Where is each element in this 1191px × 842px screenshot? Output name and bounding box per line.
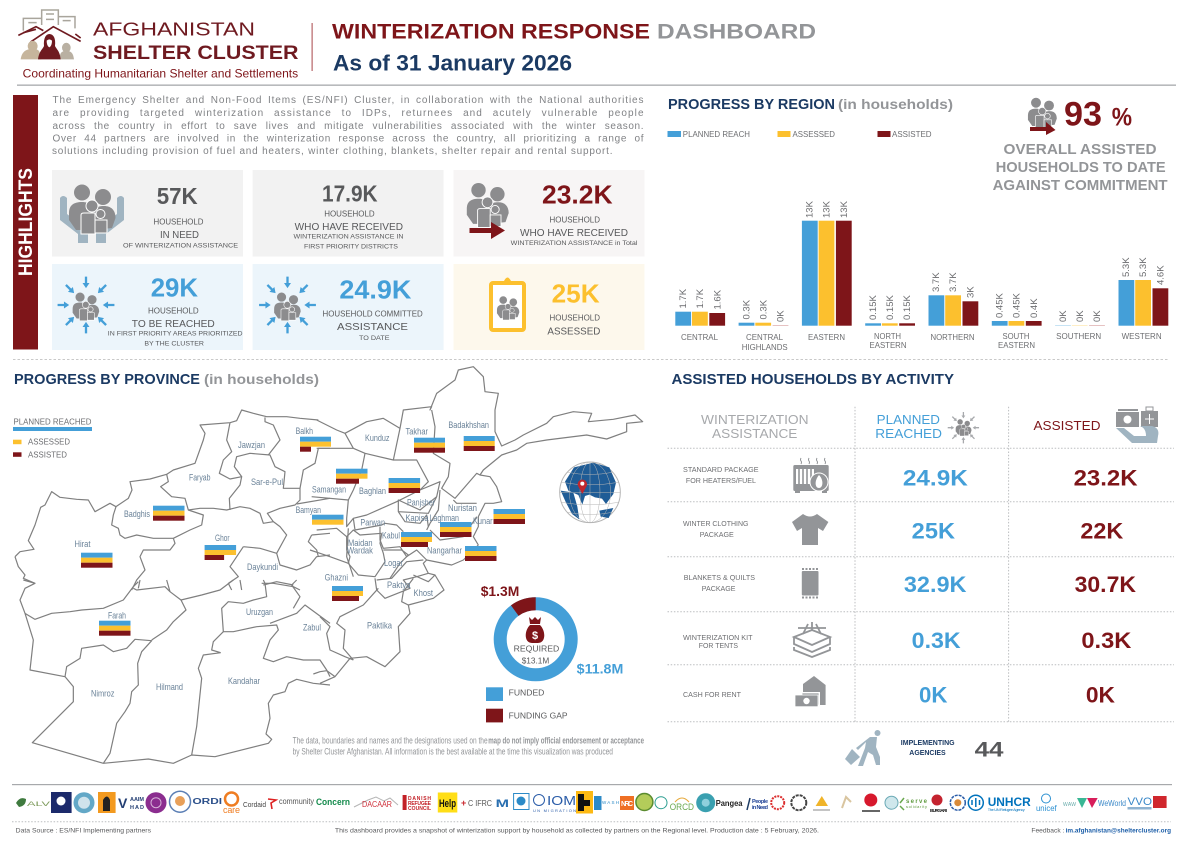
province labels: Sar-e-Pul [251, 477, 283, 488]
partner logos strip: UN MIGRATION [533, 808, 576, 813]
row: winterization kit [683, 622, 1132, 657]
row: winter clothing: WINTER CLOTHING [683, 519, 749, 528]
highlights paragraph: are providing targeted winterization assistance to IDPs, returnees and acutely vulnerable people [52, 108, 644, 119]
callout: 93 percent: HOUSEHOLDS TO DATE [996, 159, 1166, 176]
card: household in need: OF WINTERIZATION ASSISTANCE [123, 243, 239, 250]
card: first priority districts: FIRST PRIORITY DISTRICTS [304, 244, 399, 251]
group: Northern: 3.7K [931, 272, 942, 292]
table header: PLANNED [877, 413, 940, 427]
funding legend [486, 687, 568, 722]
partner logos strip [16, 791, 1167, 815]
implementing agencies [845, 730, 1004, 766]
partner logos strip: DANISH [408, 796, 431, 802]
group: Central: 1.7K [678, 288, 689, 308]
row: standard package [683, 458, 1138, 493]
row: blankets and quilts: 30.7K [1075, 572, 1136, 597]
panel: assisted households by activity [668, 371, 1174, 766]
card: received in total: 23.2K [542, 179, 613, 209]
province labels: Hirat [74, 539, 91, 550]
partner logos strip: HAD [130, 805, 144, 811]
chart: funding donut [481, 583, 623, 676]
province labels: Takhar [406, 427, 428, 438]
province labels: Samangan [312, 484, 346, 495]
province labels: Ghazni [325, 573, 348, 584]
icon: money, kit and hand [1116, 407, 1158, 443]
card: first priority districts: WINTERIZATION ASSISTANCE IN [294, 234, 404, 241]
table header: WINTERIZATION [701, 413, 809, 427]
province labels: Nuristan [448, 503, 477, 514]
row: winter clothing: 25K [912, 519, 955, 544]
province labels: Ghor [215, 533, 230, 544]
group: North Eastern: 0.15K [885, 295, 896, 320]
group: North Eastern: EASTERN [870, 341, 907, 350]
group: Central Highlands [739, 299, 788, 352]
map legend: PLANNED REACHED [14, 418, 92, 427]
group: Northern [928, 272, 978, 342]
card: first priority districts: 17.9K [322, 181, 378, 207]
group: Western: 5.3K [1121, 257, 1132, 277]
group: Central Highlands: 0K [776, 310, 787, 322]
province labels: Badghis [124, 509, 150, 520]
card: committed assistance [253, 264, 444, 350]
partner logos strip: Concern [316, 797, 350, 807]
icon: globe with location pin [560, 462, 620, 523]
icon: family with inward arrows [58, 277, 114, 333]
row: winterization kit: WINTERIZATION KIT [683, 633, 753, 642]
partner logos strip: care [223, 805, 240, 815]
footer text: im.afghanistan@sheltercluster.org [1066, 828, 1171, 835]
province labels: Kunduz [365, 433, 390, 444]
callout: 93 percent: OVERALL ASSISTED [1004, 141, 1157, 158]
partner logos strip: solidarity [906, 804, 927, 809]
province labels: Laghman [430, 513, 459, 524]
province labels [74, 420, 493, 700]
province labels: Uruzgan [246, 607, 273, 618]
card: to be reached: 29K [151, 273, 198, 303]
card: received in total: HOUSEHOLD [550, 216, 600, 225]
legend: ASSISTED [892, 130, 932, 139]
highlights paragraph: Over 44 partners are involved in the winterization response across the country, all prioritizing a range of [52, 134, 644, 145]
card: household in need [52, 170, 243, 256]
card: to be reached: HOUSEHOLD [148, 307, 199, 316]
table header: REACHED [875, 427, 942, 441]
icon: family with arrow [1028, 98, 1057, 135]
highlights paragraph: The Emergency Shelter and Non-Food Items (ES/NFI) Cluster, in collaboration with the National authorities [52, 95, 643, 106]
province labels: Panjsher [407, 498, 435, 509]
row: winterization kit: 0.3K [912, 628, 961, 653]
partner logos strip: + [461, 798, 466, 808]
province labels: Kapisa [406, 513, 429, 524]
partner logos strip: WAW [1063, 802, 1076, 808]
disclaimer: The data, boundaries and names and the designations used on the [293, 735, 488, 745]
icon: family with arrows [948, 412, 979, 443]
heading: ASSISTED HOUSEHOLDS BY ACTIVITY [672, 371, 954, 388]
highlights side bar: HIGHLIGHTS [16, 168, 37, 276]
province labels: Baghlan [359, 486, 386, 497]
row: cash for rent: CASH FOR RENT [683, 690, 741, 699]
province labels: Balkh [296, 426, 313, 437]
title [332, 20, 816, 76]
card: committed assistance: HOUSEHOLD COMMITTED [322, 310, 423, 319]
group: Eastern [802, 200, 852, 342]
map of Afghanistan provinces [15, 367, 643, 763]
partner logos strip: ORCD [670, 802, 694, 812]
card: committed assistance: ASSISTANCE [337, 322, 408, 333]
row: cash for rent: 0K [1086, 683, 1115, 708]
bar chart [675, 200, 1168, 352]
partner logos strip: in Need [752, 805, 768, 811]
partner logos strip: C IFRC [468, 799, 492, 808]
table header [701, 407, 1158, 443]
province labels: Jawzjan [238, 440, 265, 451]
card: received in total [454, 170, 644, 256]
row: blankets and quilts [684, 568, 1136, 598]
icon: family with inward arrows [259, 277, 316, 333]
group: Western: WESTERN [1122, 332, 1162, 341]
group: Northern: NORTHERN [930, 333, 975, 342]
province labels: Paktika [367, 621, 393, 632]
group: Western [1118, 257, 1168, 341]
disclaimer: map do not imply official endorsement or acceptance [488, 735, 644, 745]
table header: ASSISTED [1034, 419, 1100, 433]
chart: funding donut: REQUIRED [514, 644, 559, 654]
partner logos strip: REFUGEE [408, 801, 432, 807]
row: winter clothing: PACKAGE [700, 530, 734, 539]
card: household in need: IN NEED [160, 230, 199, 241]
row: winterization kit: FOR TENTS [699, 641, 738, 650]
province labels: Nangarhar [427, 546, 462, 557]
province labels: Wardak [347, 546, 373, 557]
partner logos strip: People [752, 799, 768, 805]
highlights paragraph: solutions including provision of fuel and heaters, winter clothing, blankets, shelter repair and rental support. [52, 146, 612, 157]
title: WINTERIZATION RESPONSE [332, 20, 650, 44]
title: DASHBOARD [657, 20, 816, 44]
province labels: Badakhshan [448, 420, 489, 431]
row: blankets and quilts: 32.9K [904, 572, 967, 597]
group: Western: 5.3K [1138, 257, 1149, 277]
row: cash for rent [683, 676, 1115, 708]
group: South Eastern: 0.45K [1012, 293, 1022, 318]
group: North Eastern: 0.15K [868, 295, 879, 320]
row: standard package: STANDARD PACKAGE [683, 465, 759, 474]
group: Central Highlands: 0.3K [741, 299, 752, 320]
partner logos strip: VVO [1128, 796, 1152, 808]
group: Eastern: 13K [805, 200, 816, 218]
card: first priority districts [253, 170, 444, 256]
province boundaries [15, 367, 643, 763]
group: South Eastern: 0.4K [1029, 298, 1040, 318]
group: North Eastern: 0.15K [902, 295, 913, 320]
province labels: Kunar [473, 516, 493, 527]
province labels: Daykundi [247, 562, 278, 573]
province progress flags [81, 436, 525, 636]
card: to be reached: IN FIRST PRIORITY AREAS PRIORITIZED [108, 331, 243, 338]
panel: progress by province [13, 367, 644, 763]
group: Eastern: 13K [839, 200, 850, 218]
partner logos strip: DACAAR [362, 800, 392, 809]
group: South Eastern: 0.45K [994, 293, 1006, 318]
province labels: Zabul [303, 623, 321, 634]
logo tagline: Coordinating Humanitarian Shelter and Settlements [23, 66, 298, 80]
group: Central: 1.6K [712, 289, 723, 310]
heading [14, 371, 319, 388]
card: received in total: WINTERIZATION ASSISTANCE in Total [511, 240, 638, 247]
province labels: Bamyan [296, 505, 321, 516]
group: North Eastern [865, 295, 915, 350]
partner logos strip: WeWorld [1098, 799, 1126, 808]
panel: highlights [13, 95, 644, 350]
partner logos strip: unicef [1036, 804, 1057, 813]
partner logos strip: Cordaid [243, 800, 266, 809]
card: to be reached [52, 264, 243, 350]
row: blankets and quilts: BLANKETS & QUILTS [684, 573, 755, 582]
partner logos strip: UNHCR [988, 795, 1031, 809]
footer text: This dashboard provides a snapshot of winterization support by household as collected by partners on the Regional level. Production date : 5 February, 2026. [335, 828, 819, 835]
card: committed assistance: 24.9K [339, 274, 412, 304]
icon: house and cash [795, 676, 826, 707]
card: received in total: WHO HAVE RECEIVED [520, 228, 628, 239]
province labels: Kabul [382, 531, 400, 542]
legend: ASSESSED [792, 130, 835, 139]
group: Eastern: 13K [822, 200, 833, 218]
footer text: Data Source : ES/NFI Implementing partners [16, 828, 152, 835]
row: standard package: FOR HEATERS/FUEL [686, 476, 756, 485]
province labels: Maidan [348, 538, 373, 549]
group: Southern: SOUTHERN [1056, 332, 1101, 341]
partner logos strip: Pangea [716, 799, 743, 808]
province labels: Logar [384, 558, 403, 569]
province labels: Paktya [387, 580, 411, 591]
card: first priority districts: HOUSEHOLD [324, 210, 375, 219]
icon: heater [793, 458, 829, 493]
disclaimer: by Shelter Cluster Afghanistan. All information is the best available at the time this visualization was produced [293, 747, 613, 757]
card: household in need: HOUSEHOLD [154, 218, 204, 227]
card: first priority districts: WHO HAVE RECEIVED [295, 222, 403, 233]
card: assessed: HOUSEHOLD [550, 314, 600, 323]
funding legend: FUNDING GAP [509, 711, 568, 721]
callout: 93 percent [993, 96, 1168, 194]
row: standard package: 23.2K [1074, 465, 1138, 490]
group: Central Highlands: CENTRAL [746, 333, 784, 342]
map legend: ASSISTED [28, 451, 67, 460]
callout: 93 percent: AGAINST COMMITMENT [993, 177, 1168, 194]
partner logos strip: ALV [27, 802, 50, 808]
icon: blanket [802, 568, 818, 598]
group: Southern: 0K [1075, 310, 1086, 322]
row: winter clothing: 22K [1080, 519, 1123, 544]
group: Central: CENTRAL [681, 333, 719, 342]
partner logos strip: NRC [621, 801, 633, 808]
partner logos strip: serve [906, 799, 928, 805]
card: assessed: ASSESSED [547, 327, 600, 338]
icon: family with arrow [467, 183, 509, 239]
logo icon: buildings and people [18, 10, 81, 59]
logo wordmark: AFGHANISTAN [93, 20, 255, 40]
logo: Afghanistan Shelter Cluster [18, 10, 299, 80]
group: Southern: 0K [1058, 310, 1069, 322]
group: Central Highlands: HIGHLANDS [742, 343, 788, 352]
chart: funding donut: $1.3M [481, 583, 519, 599]
card: assessed: 25K [552, 279, 600, 309]
group: Southern: 0K [1092, 310, 1103, 322]
funding legend: FUNDED [509, 688, 544, 698]
partner logos strip: community [279, 797, 314, 806]
heading [668, 96, 953, 113]
card: assessed [454, 264, 644, 350]
chart: funding donut: $13.1M [522, 655, 549, 665]
group: Western: 4.6K [1156, 265, 1166, 285]
group: North Eastern: NORTH [874, 332, 901, 341]
province labels: Nimroz [91, 689, 115, 700]
group: Central: 1.7K [695, 288, 706, 308]
group: South Eastern [992, 293, 1042, 350]
row: cash for rent: 0K [919, 683, 948, 708]
panel: progress by region [668, 96, 1168, 352]
legend [668, 130, 932, 139]
map legend [13, 418, 92, 460]
implementing agencies: AGENCIES [909, 750, 946, 757]
partner logos strip: ORDI [192, 797, 222, 806]
title: As of 31 January 2026 [333, 50, 572, 76]
card: to be reached: BY THE CLUSTER [144, 341, 204, 348]
card: to be reached: TO BE REACHED [132, 319, 215, 330]
partner logos strip: Help [439, 798, 456, 810]
row: standard package: 24.9K [903, 465, 968, 490]
footer text [16, 828, 1171, 835]
chart: funding donut: $11.8M [577, 660, 623, 676]
highlights paragraph: across the country in effort to save lives and mitigate vulnerabilities associated with the winter season. [52, 121, 644, 132]
heading: PROGRESS BY PROVINCE [14, 371, 200, 388]
footer text: Feedback : [1031, 828, 1065, 835]
card: committed assistance: TO DATE [359, 335, 390, 342]
callout: 93 percent: % [1112, 104, 1132, 132]
group: Eastern: EASTERN [808, 333, 845, 342]
heading: (in households) [838, 96, 953, 112]
province labels: Faryab [189, 473, 210, 484]
icon: clipboard with family [491, 278, 524, 330]
province labels: Hilmand [156, 682, 183, 693]
card: household in need: 57K [157, 183, 198, 209]
callout: 93 percent: 93 [1064, 96, 1102, 134]
disclaimer [293, 735, 644, 757]
province labels: Parwan [360, 518, 385, 529]
partner logos strip: WASH [602, 800, 619, 805]
legend: PLANNED REACH [683, 130, 750, 139]
group: Central Highlands: 0.3K [758, 299, 769, 320]
group: Central [675, 288, 725, 342]
partner logos strip: AAIM [130, 797, 144, 803]
heading: (in households) [204, 371, 319, 387]
partner logos strip: M [496, 798, 509, 810]
implementing agencies: 44 [975, 739, 1004, 762]
logo: Afghanistan Shelter Cluster: SHELTER CLUSTER [93, 42, 298, 64]
row: blankets and quilts: PACKAGE [702, 584, 736, 593]
icon: walking person with bag [845, 730, 880, 766]
row: winter clothing [683, 514, 1123, 545]
highlights paragraph [52, 95, 644, 157]
group: South Eastern: SOUTH [1002, 332, 1030, 341]
icon: t-shirt [792, 514, 828, 545]
highlights side bar [13, 95, 38, 350]
partner logos strip: COUNCIL [408, 806, 431, 812]
heading: PROGRESS BY REGION [668, 96, 835, 113]
icon: money bag [526, 617, 544, 643]
table header: ASSISTANCE [712, 427, 797, 441]
row: winterization kit: 0.3K [1081, 628, 1132, 653]
partner logos strip: The UN Refugee Agency [988, 807, 1025, 812]
province labels: Kandahar [228, 676, 260, 687]
province labels: Farah [108, 611, 126, 622]
partner logos strip: IOM [547, 793, 576, 808]
map legend: ASSESSED [28, 438, 70, 447]
group: Northern: 3.7K [948, 272, 959, 292]
partner logos strip: BURSARI [930, 808, 947, 813]
icon: tent kit [794, 622, 830, 657]
icon: money bag: $ [532, 630, 538, 642]
icon: family in hands [60, 184, 124, 243]
partner logos strip: V [118, 795, 128, 811]
group: Southern [1055, 310, 1105, 341]
group: South Eastern: EASTERN [998, 341, 1035, 350]
group: Northern: 3K [966, 286, 976, 298]
implementing agencies: IMPLEMENTING [901, 740, 955, 747]
province labels: Khost [414, 588, 433, 599]
